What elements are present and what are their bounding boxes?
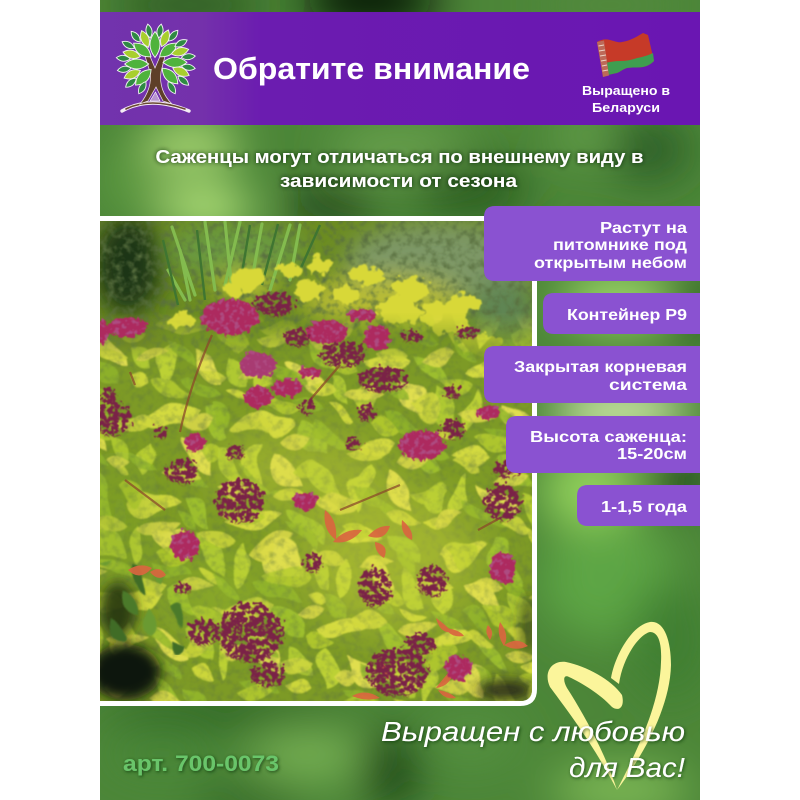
panel: grown outdoors xyxy=(484,206,700,281)
panel: container xyxy=(543,293,700,334)
golden foliage xyxy=(100,316,532,701)
panel: grown outdoors: Растут на xyxy=(600,220,687,237)
photo: spirea shrub xyxy=(100,221,532,701)
panel: seedling height: 15-20см xyxy=(617,446,687,463)
panel: container: Контейнер Р9 xyxy=(567,307,687,324)
made in Belarus caption: Выращено в xyxy=(582,83,670,98)
heart outline xyxy=(548,622,671,790)
subtitle notice: Саженцы могут отличаться по внешнему виду в xyxy=(156,146,644,167)
panel: seedling height xyxy=(506,416,700,473)
photo frame xyxy=(100,216,537,706)
red young leaves xyxy=(128,510,528,700)
slogan: для Вас! xyxy=(569,752,685,783)
yellow flowers xyxy=(168,257,502,355)
green bokeh background xyxy=(100,0,715,800)
panel: closed root system: Закрытая корневая xyxy=(514,359,687,376)
article number: арт. 700-0073 xyxy=(123,751,279,776)
panel: grown outdoors: питомнике под xyxy=(553,237,687,254)
slogan xyxy=(381,716,685,783)
panel: closed root system: система xyxy=(609,377,687,394)
title: Обратите внимание xyxy=(213,51,530,86)
panel: age xyxy=(577,485,700,526)
panel: closed root system xyxy=(484,346,700,403)
shaded lower-left leaves xyxy=(98,556,186,655)
slogan: Выращен с любовью xyxy=(381,716,685,747)
icon: Belarus flag xyxy=(597,33,654,77)
panel: grown outdoors: открытым небом xyxy=(534,255,687,272)
made in Belarus caption xyxy=(582,83,670,115)
panel: seedling height: Высота саженца: xyxy=(530,429,687,446)
header band xyxy=(100,12,700,125)
branches xyxy=(125,335,500,530)
subtitle notice: зависимости от сезона xyxy=(280,170,518,191)
panel: age: 1-1,5 года xyxy=(601,499,687,516)
subtitle notice xyxy=(156,146,644,191)
tonal variation of the foliage xyxy=(94,430,480,640)
made in Belarus caption: Беларуси xyxy=(592,100,660,115)
flower clusters xyxy=(95,293,521,697)
logo: tree xyxy=(116,24,196,111)
dark ground gaps xyxy=(89,582,536,700)
